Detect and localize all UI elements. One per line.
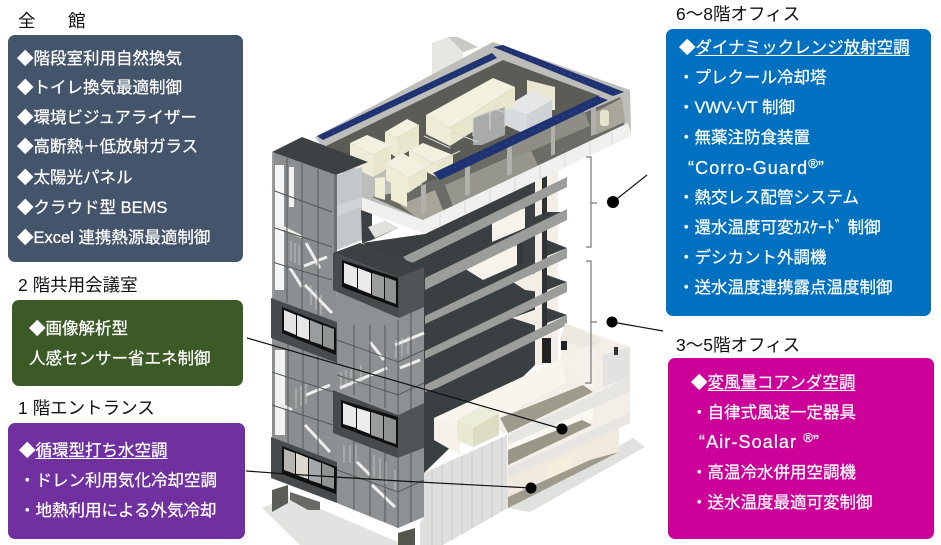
- panel: 2F meeting room: 人感センサー省エネ制御: [29, 350, 210, 368]
- office floor slabs: [403, 177, 567, 392]
- panel: 6-8 floor offices: ・デシカント外調機: [678, 249, 826, 267]
- projecting window box lower left: [271, 437, 337, 503]
- panel: 3-5 floor offices: ・送水温度最適可変制御: [691, 494, 872, 512]
- panel: whole building: ◆クラウド型 BEMS: [17, 199, 167, 217]
- panel: 3-5 floor offices: ・自律式風速一定器具: [691, 404, 856, 422]
- panel: whole building: ◆階段室利用自然換気: [17, 50, 182, 68]
- panel: whole building: ◆トイレ換気最適制御: [17, 79, 182, 97]
- window mullions: [272, 158, 424, 528]
- panel: whole building: ◆高断熱＋低放射ガラス: [17, 138, 198, 156]
- heading: 2F meeting room: 2 階共用会議室: [18, 275, 138, 295]
- leader: 1F entrance: [246, 471, 536, 494]
- ground plane: [262, 438, 645, 545]
- dark backing of office floors: [362, 180, 535, 473]
- lower terrace block: [434, 323, 630, 508]
- panel: 6-8 floor offices: ◆ダイナミックレンジ放射空調: [679, 39, 910, 57]
- heading: 3-5 floor offices: 3～5階オフィス: [676, 335, 800, 355]
- panel: 3-5 floor offices: ◆変風量コアンダ空調: [691, 374, 855, 392]
- projecting window box upper right: [333, 243, 424, 318]
- heading: whole building: 全: [18, 11, 36, 31]
- heading: whole building: [18, 11, 86, 31]
- projecting window box lower right: [333, 390, 424, 458]
- leader: 3-5 floors: [606, 316, 663, 331]
- base pillars: [272, 485, 415, 545]
- panel: 1F entrance: ・地熱利用による外気冷却: [19, 502, 217, 520]
- panel: 6-8 floor offices: ・無薬注防食装置: [678, 129, 810, 147]
- panel: 1F entrance: ・ドレン利用気化冷却空調: [19, 472, 217, 490]
- heading: 6-8 floor offices: 6～8階オフィス: [676, 4, 800, 24]
- projecting window box upper left: [271, 298, 337, 363]
- panel: 2F meeting room: ◆画像解析型: [29, 320, 128, 338]
- panel: 6-8 floor offices: ・送水温度連携露点温度制御: [678, 279, 892, 297]
- panel: whole building: ◆太陽光パネル: [17, 169, 132, 187]
- stair flights: [276, 224, 424, 507]
- panel: 1F entrance: [8, 423, 245, 539]
- panel: 6-8 floor offices: ・還水温度可変ｶｽｹｰﾄﾞ 制御: [678, 219, 881, 237]
- panel: 6-8 floor offices: ・プレクール冷却塔: [678, 69, 826, 87]
- bracket: 3-5 floors: [585, 261, 597, 383]
- panel: 3-5 floor offices: ・高温冷水併用空調機: [691, 464, 856, 482]
- heading: 1F entrance: 1 階エントランス: [18, 398, 155, 418]
- panel: 1F entrance: ◆循環型打ち水空調: [19, 442, 168, 460]
- panel: 6-8 floor offices: “Corro-Guard®”: [688, 156, 825, 178]
- panel: whole building: [8, 35, 243, 262]
- panel: 3-5 floor offices: “Air-Soalar ®”: [699, 430, 820, 452]
- panel: 6-8 floor offices: [666, 29, 931, 316]
- bracket: 6-8 floors: [586, 157, 597, 247]
- rooftop stair core: [432, 37, 478, 88]
- rooftop level: [315, 42, 631, 234]
- panel: 2F meeting room: [12, 300, 243, 386]
- panel: 6-8 floor offices: ・VWV-VT 制御: [678, 99, 795, 117]
- solar panels: [317, 45, 624, 180]
- panel: whole building: ◆Excel 連携熱源最適制御: [17, 229, 210, 247]
- panel: 3-5 floor offices: [668, 358, 934, 539]
- leader: 6-8 floors: [607, 175, 647, 208]
- rear columns and walls of office floors: [462, 170, 558, 365]
- leader: 2F meeting room: [247, 338, 568, 434]
- corrugated lower wall: [420, 435, 508, 545]
- panel: whole building: ◆環境ビジュアライザー: [17, 109, 197, 127]
- stair tower: [272, 137, 424, 528]
- heading: whole building: 館: [68, 11, 86, 31]
- rooftop equipment: [350, 78, 609, 207]
- panel: 6-8 floor offices: ・熱交レス配管システム: [678, 189, 859, 207]
